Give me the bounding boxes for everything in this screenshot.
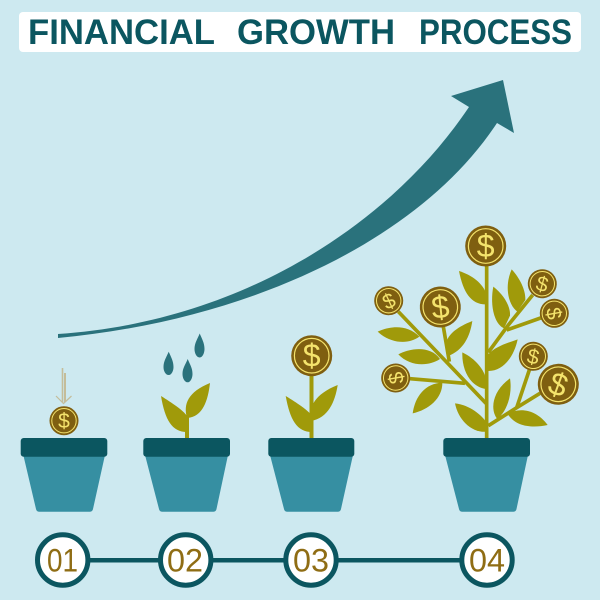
coin: right third: $ — [525, 345, 542, 370]
coin: top: $ — [477, 228, 495, 264]
icon: coin: $ — [303, 338, 321, 374]
coins on tree — [369, 226, 585, 411]
coin: left large — [418, 284, 463, 330]
timeline — [38, 535, 512, 585]
step 3: plant with one coin — [268, 335, 354, 512]
icon: coin — [50, 406, 78, 435]
icon: coin — [291, 335, 332, 376]
title: FINANCIAL — [28, 13, 215, 52]
step 1: coin dropping into pot — [21, 368, 107, 512]
coin: far left — [369, 281, 408, 320]
step 2: watered sprout — [143, 334, 230, 512]
icon: water drops — [164, 334, 204, 382]
growth arrow — [58, 80, 514, 338]
step marker 04 — [462, 535, 512, 585]
step marker 04: 04 — [469, 542, 505, 578]
step marker 03 — [286, 535, 336, 585]
pot 3 — [268, 438, 354, 512]
step marker 02: 02 — [167, 542, 203, 578]
coin: far left: $ — [379, 289, 400, 314]
step 4: full money tree — [369, 226, 585, 512]
icon: coin: $ — [58, 410, 70, 433]
plant stem and leaves — [286, 372, 338, 439]
step marker 02 — [160, 535, 211, 585]
coin: right large: $ — [544, 364, 573, 404]
coin: right top — [525, 266, 560, 301]
sprout — [161, 383, 210, 439]
coin: right third — [516, 339, 550, 373]
step marker 01: 01 — [47, 542, 78, 578]
step marker 01 — [38, 535, 88, 585]
coin: right top: $ — [533, 272, 551, 297]
step marker 03: 03 — [293, 542, 329, 578]
coin: right second: $ — [541, 306, 566, 322]
coin: left large: $ — [430, 288, 451, 326]
title: PROCESS — [419, 13, 572, 52]
coin: top — [465, 226, 506, 266]
icon: down arrow — [56, 368, 72, 404]
title — [19, 12, 581, 52]
coin: low left: $ — [384, 370, 409, 386]
pot 2 — [143, 438, 230, 512]
coin: right large — [532, 358, 585, 411]
coin: low left — [379, 361, 412, 395]
pot 1 — [21, 438, 107, 512]
coin: right second — [538, 297, 571, 330]
title: GROWTH — [237, 13, 395, 52]
tree branches and leaves — [378, 265, 548, 438]
pot 4 — [443, 438, 530, 512]
